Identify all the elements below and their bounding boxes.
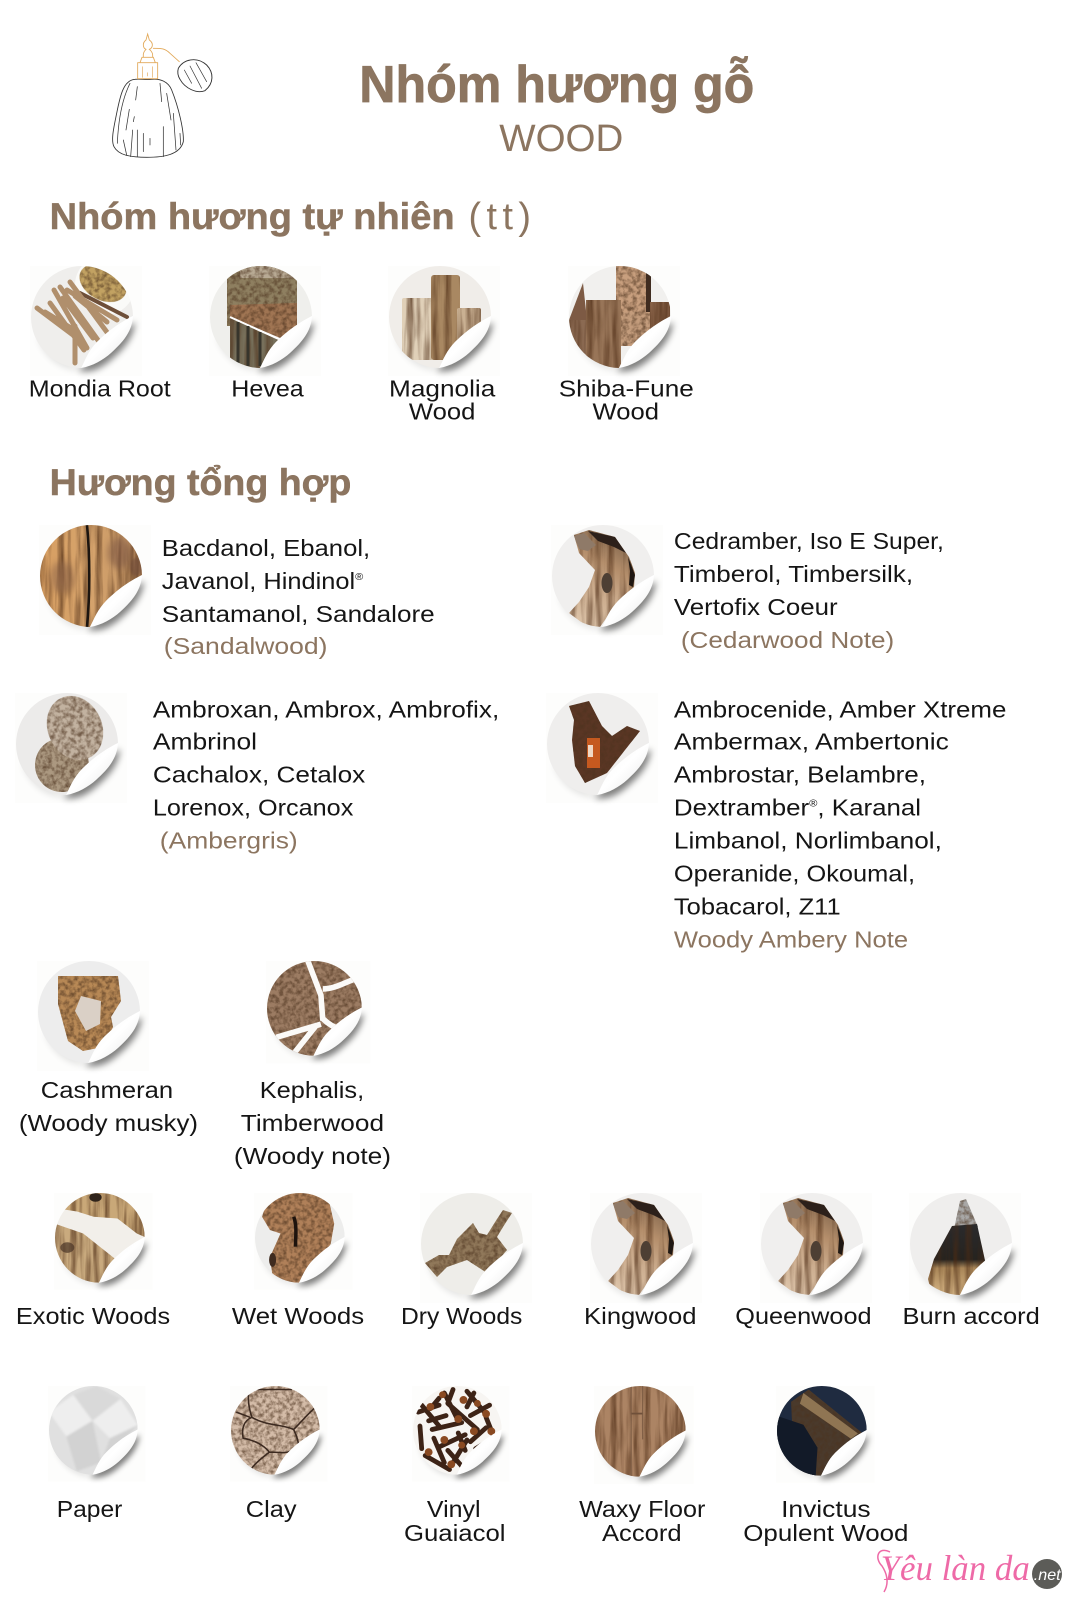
text: Woody Ambery synthetics: Woody Ambery Note xyxy=(674,926,908,953)
heading: synthetic group: Hương tổng hợp xyxy=(50,462,351,503)
icon: perfume atomizer bottle xyxy=(113,34,212,157)
text: Ambergris synthetics xyxy=(153,696,499,854)
sticker: Cedarwood xyxy=(551,525,663,635)
text: Ambergris synthetics: Cachalox, Cetalox xyxy=(153,761,366,788)
text: Cedarwood synthetics xyxy=(674,528,944,653)
sticker: Shiba-Fune Wood xyxy=(568,266,680,376)
text: Ambergris synthetics: Ambrinol xyxy=(153,728,257,755)
text: Cedarwood synthetics: Vertofix Coeur xyxy=(674,594,838,620)
sticker: Exotic Woods xyxy=(54,1193,153,1290)
label: Wet Woods: Wet Woods xyxy=(232,1303,364,1329)
label: Kephalis, Timberwood: Timberwood xyxy=(241,1110,384,1136)
label: Waxy Floor Accord: Accord xyxy=(602,1520,682,1546)
label: Invictus Opulent Wood: Invictus xyxy=(781,1496,871,1522)
heading: natural group: (tt) xyxy=(468,196,531,238)
text: Ambergris synthetics: (Ambergris) xyxy=(160,827,298,854)
label: Queenwood: Queenwood xyxy=(735,1303,872,1329)
text: Woody Ambery synthetics: Ambrocenide, Amber Xtreme xyxy=(674,696,1006,723)
label: Cashmeran: Cashmeran xyxy=(41,1077,173,1103)
text: Cedarwood synthetics: Cedramber, Iso E Super, xyxy=(674,528,944,554)
text: Woody Ambery synthetics: Tobacarol, Z11 xyxy=(674,893,841,920)
text: Cedarwood synthetics: (Cedarwood Note) xyxy=(681,627,894,653)
watermark: Yêu làn da .net: Yêu làn da xyxy=(881,1548,1030,1588)
text: Cedarwood synthetics: Timberol, Timbersilk, xyxy=(674,561,913,587)
label: Vinyl Guaiacol: Guaiacol xyxy=(404,1520,505,1546)
text: Sandalwood synthetics xyxy=(162,535,435,659)
sticker: Dry Woods xyxy=(420,1193,532,1303)
text: Sandalwood synthetics: ® xyxy=(355,572,364,583)
text: Woody Ambery synthetics: ® xyxy=(809,798,818,810)
sticker: Waxy Floor Accord xyxy=(594,1386,694,1484)
label: Invictus Opulent Wood xyxy=(743,1496,908,1546)
sticker: Paper xyxy=(48,1386,146,1482)
text: Ambergris synthetics: Lorenox, Orcanox xyxy=(153,794,354,821)
text: Woody Ambery synthetics xyxy=(674,696,1006,953)
title xyxy=(359,55,754,160)
text: Woody Ambery synthetics: Operanide, Okoumal, xyxy=(674,860,915,887)
text: Sandalwood synthetics: Santamanol, Sandalore xyxy=(162,601,435,627)
label: Waxy Floor Accord xyxy=(579,1496,706,1546)
sticker: Hevea xyxy=(209,266,321,376)
label: Cashmeran: (Woody musky) xyxy=(19,1110,198,1136)
title: Nhóm hương gỗ xyxy=(359,55,754,113)
label: Shiba-Fune Wood xyxy=(559,375,694,425)
sticker: Kingwood xyxy=(590,1193,702,1303)
text: Woody Ambery synthetics: Ambermax, Ambertonic xyxy=(674,728,949,755)
sticker: Invictus Opulent Wood xyxy=(776,1386,875,1483)
text: Woody Ambery synthetics: Limbanol, Norlimbanol, xyxy=(674,827,942,854)
label: Waxy Floor Accord: Waxy Floor xyxy=(579,1496,706,1522)
sticker: Vinyl Guaiacol xyxy=(412,1386,510,1482)
sticker: Clay xyxy=(230,1386,328,1482)
label: Shiba-Fune Wood: Shiba-Fune xyxy=(559,375,694,402)
label: Vinyl Guaiacol: Vinyl xyxy=(427,1496,481,1522)
label: Kephalis, Timberwood xyxy=(234,1077,391,1169)
sticker: Magnolia Wood xyxy=(388,266,500,376)
label: Kingwood: Kingwood xyxy=(584,1303,696,1329)
label: Shiba-Fune Wood: Wood xyxy=(593,398,659,425)
label: Burn accord: Burn accord xyxy=(902,1303,1040,1329)
text: Woody Ambery synthetics: , Karanal xyxy=(817,794,921,821)
label: Kephalis, Timberwood: (Woody note) xyxy=(234,1143,391,1169)
label: Exotic Woods: Exotic Woods xyxy=(16,1303,170,1329)
label: Vinyl Guaiacol xyxy=(404,1496,505,1546)
label: Kephalis, Timberwood: Kephalis, xyxy=(260,1077,364,1103)
label: Magnolia Wood: Wood xyxy=(409,398,475,425)
sticker: Wet Woods xyxy=(254,1193,353,1290)
heading: natural group: Nhóm hương tự nhiên xyxy=(50,196,455,237)
text: Sandalwood synthetics: Javanol, Hindinol xyxy=(162,568,336,594)
sticker: Ambergris xyxy=(15,687,127,803)
label: Hevea: Hevea xyxy=(231,375,304,402)
sticker: Woody Ambery xyxy=(546,693,658,803)
sticker: Burn accord xyxy=(909,1193,1021,1303)
watermark: Yêu làn da .net: .net xyxy=(1034,1567,1061,1584)
sticker: Sandalwood xyxy=(39,525,151,635)
label: Magnolia Wood xyxy=(389,375,496,425)
text: Woody Ambery synthetics: Dextramber xyxy=(674,794,793,821)
title: WOOD xyxy=(499,118,623,160)
text: Sandalwood synthetics: Bacdanol, Ebanol, xyxy=(162,535,370,561)
label: Paper: Paper xyxy=(57,1496,123,1522)
label: Invictus Opulent Wood: Opulent Wood xyxy=(743,1520,908,1546)
label: Mondia Root: Mondia Root xyxy=(29,375,171,402)
text: Sandalwood synthetics: (Sandalwood) xyxy=(164,633,328,659)
label: Cashmeran xyxy=(19,1077,198,1136)
sticker: Mondia Root xyxy=(31,266,140,376)
sticker: Cashmeran xyxy=(37,961,149,1071)
label: Magnolia Wood: Magnolia xyxy=(389,375,496,402)
sticker: Queenwood xyxy=(760,1193,872,1303)
sticker: Kephalis xyxy=(266,961,370,1063)
label: Clay: Clay xyxy=(246,1496,297,1522)
text: Woody Ambery synthetics: Ambrostar, Belambre, xyxy=(674,761,926,788)
label: Dry Woods: Dry Woods xyxy=(401,1303,522,1329)
text: Ambergris synthetics: Ambroxan, Ambrox, Ambrofix, xyxy=(153,696,499,723)
